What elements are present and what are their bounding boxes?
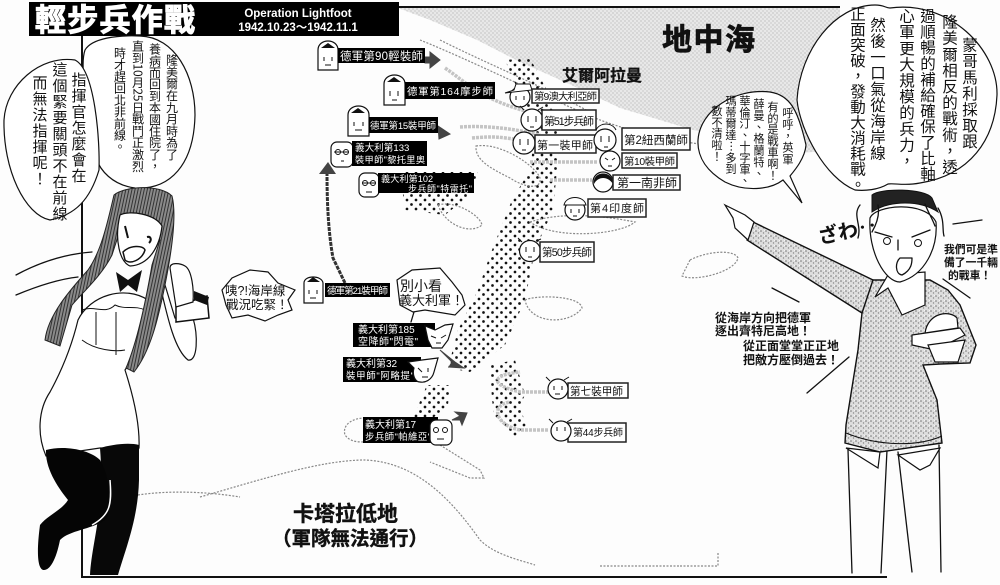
icon: German head (318, 41, 338, 70)
callout: head-on attack: 從正面堂堂正正地 (743, 338, 839, 353)
speech bubble: do not underestimate Italy: 義大利軍！ (399, 293, 464, 308)
speech bubble: British tanks: 華倫汀、十字軍、 (737, 95, 753, 186)
German 21st Panzer division label: 德軍第21裝甲師 (327, 285, 388, 297)
callout: advance from coast: 從海岸方向把德軍 (715, 310, 811, 325)
heading: Qattara Depression: （軍隊無法通行） (272, 522, 428, 551)
speech bubble: coast front (222, 270, 295, 321)
44th Infantry: 第44步兵師 (573, 426, 623, 439)
Italian 102nd division label: 義大利第102 (381, 173, 433, 184)
50th Infantry (518, 238, 594, 262)
1st Armoured: 第一裝甲師 (537, 138, 593, 152)
speech bubble: Montgomery strategy: 正面突破，發動大消耗戰。 (847, 6, 869, 192)
German 21st Panzer division label (304, 277, 390, 303)
hair (857, 190, 944, 238)
9th Australian (505, 84, 599, 107)
callout: 1000 tanks: 備了一千輛 (944, 255, 998, 269)
German 15th Panzer division label: 德軍第15裝甲師 (370, 120, 436, 132)
speech bubble: coast front: 戰況吃緊！ (226, 297, 289, 312)
callout: head-on attack (743, 338, 839, 367)
Italian 185th division label: 義大利第185 (358, 323, 415, 336)
icon: German head (304, 277, 323, 303)
eyes and mouth (125, 226, 151, 243)
2nd New Zealand: 第2紐西蘭師 (624, 133, 688, 147)
speech bubble: British tanks: 有的是戰車啊！ (765, 100, 781, 181)
fist (170, 264, 193, 307)
face (870, 207, 936, 282)
tunic folds (82, 305, 145, 355)
sea: Mediterranean shading (398, 8, 840, 153)
hair (45, 188, 174, 372)
speech bubble: commander absent: 指揮官怎麼會在 (68, 72, 90, 184)
Italian 32nd division label (343, 357, 438, 382)
callout: 1000 tanks: 我們可是準 (944, 242, 998, 256)
white edge between legs (92, 480, 111, 525)
51st Infantry: 第51步兵師 (544, 114, 594, 128)
speech bubble: British tanks (698, 92, 806, 203)
speech bubble: Rommel in hospital: 養病而回到本國住院了， (146, 43, 164, 172)
icon: Italian soldier head (408, 358, 438, 382)
pointing arm (747, 222, 873, 313)
German 164th division label: 德軍第164摩步師 (407, 85, 493, 98)
collar (875, 272, 925, 315)
figure: Rommel character (simplified) (38, 188, 209, 575)
bent leg stocking (38, 448, 110, 570)
heading: Qattara Depression (272, 498, 428, 551)
callout: 1000 tanks: 的戰車！ (948, 268, 991, 282)
speech bubble: Rommel in hospital: 隆美爾在九月時為了 (164, 53, 180, 160)
10th Armoured (600, 151, 677, 171)
Italian 32nd division label: 裝甲師"阿略提" (346, 370, 414, 382)
Italian 133rd division label: 裝甲師"黎托里奧 (355, 154, 425, 165)
Italian 32nd division label: 義大利第32 (346, 357, 398, 370)
Italian 133rd division label (331, 141, 427, 167)
map frame (82, 7, 887, 577)
standing leg stocking (90, 444, 139, 575)
50th Infantry: 第50步兵師 (542, 246, 592, 259)
callout: advance from coast: 逐出齊特尼高地！ (715, 323, 811, 338)
4th Indian: 第4印度師 (590, 201, 644, 215)
4th Indian (564, 198, 646, 220)
icon: Italian mask (430, 420, 452, 445)
heading: Qattara Depression: 卡塔拉低地 (293, 498, 398, 528)
heading: Mediterranean: 地中海 (662, 15, 755, 59)
icon: Italian mask (359, 173, 379, 197)
German 90th Light division label (318, 41, 425, 70)
title bar: Operation Lightfoot (244, 8, 352, 20)
cuff (176, 296, 209, 322)
heading: El Alamein: 艾爾阿拉曼 (562, 62, 642, 86)
speech bubble: do not underestimate Italy (397, 268, 465, 322)
speech bubble: Rommel in hospital (83, 36, 195, 188)
speech bubble: commander absent: 這個緊要關頭不在前線 (50, 61, 70, 222)
action lines: Montgomery (772, 220, 982, 393)
speech bubble: do not underestimate Italy: 別小看 (400, 278, 442, 294)
minefields (400, 58, 560, 437)
2nd New Zealand (594, 124, 690, 151)
speech bubble: Montgomery strategy: 蒙哥馬利採取跟 (959, 37, 981, 150)
coastal road lines (420, 40, 800, 152)
holding tank in hand (912, 314, 965, 350)
speech bubble: Montgomery strategy: 然後一口氣從海岸線 (867, 17, 889, 161)
icon: German head (384, 75, 405, 105)
German 90th Light division label: 德軍第90輕裝師 (340, 49, 423, 63)
1st South African (593, 172, 680, 192)
7th Armoured: 第七裝甲師 (570, 385, 623, 398)
arrow: 21st Panzer moving north (319, 162, 345, 283)
shirt tail (846, 448, 940, 470)
icon: German head (348, 106, 369, 136)
speech bubble: Montgomery strategy: 過順暢的補給確保了比軸 (917, 8, 939, 182)
speech bubble: Montgomery strategy: 心軍更大規模的兵力， (896, 8, 918, 169)
speech bubble: British tanks: 呼呼，英軍 (780, 107, 796, 165)
Italian 185th division label (353, 323, 453, 348)
German 15th Panzer division label (348, 106, 438, 136)
Italian 17th division label: 步兵師"帕維亞" (365, 431, 431, 443)
figure: Montgomery character (simplified) (725, 190, 976, 573)
51st Infantry (520, 106, 596, 131)
pointing hand (725, 205, 754, 240)
sound effect: ざわ‥ (816, 213, 880, 249)
speech bubble: coast front: 咦?!海岸線 (225, 283, 286, 298)
speech bubble: commander absent (4, 59, 99, 222)
Italian 185th division label: 空降師"閃電" (358, 335, 418, 348)
speech bubble: Rommel in hospital: 直到10月25日戰鬥正激烈 (130, 40, 146, 173)
Italian 17th division label (363, 417, 452, 445)
7th Armoured (546, 377, 628, 399)
body tunic (40, 293, 148, 456)
Italian 102nd division label: 步兵師"特雷托" (408, 183, 472, 194)
German 164th division label (384, 75, 495, 105)
allied divisions (505, 84, 690, 442)
ridges and terrain (138, 146, 738, 566)
callout: 1000 tanks (944, 242, 998, 282)
speech bubble: British tanks: 數不清啦！ (709, 104, 725, 162)
speech bubble: British tanks: 薛曼、格蘭特、 (751, 98, 767, 179)
speech bubble: Montgomery strategy (797, 5, 997, 192)
speech bubble: Rommel in hospital: 時才趕回北非前線。 (112, 47, 128, 152)
face (118, 213, 162, 266)
eyes and mouth (875, 230, 930, 275)
Italian 102nd division label (359, 173, 474, 197)
sweater hem (846, 433, 942, 444)
10th Armoured: 第10裝甲師 (624, 155, 675, 168)
44th Infantry (549, 419, 626, 442)
speech bubble: Montgomery strategy: 隆美爾相反的戰術，透 (939, 14, 961, 175)
open mouth (123, 246, 145, 262)
legs (848, 445, 941, 573)
sweater body (845, 278, 976, 452)
title bar: 1942.10.23～1942.11.1 (238, 22, 358, 34)
neck bow (116, 270, 142, 292)
9th Australian: 第9澳大利亞師 (534, 90, 597, 103)
Italian 133rd division label: 義大利第133 (355, 142, 409, 154)
action lines: Rommel (16, 205, 92, 295)
icon: Italian mask (331, 142, 353, 167)
title bar (29, 0, 399, 40)
1st South African: 第一南非師 (617, 175, 677, 190)
callout: head-on attack: 把敵方壓倒過去！ (743, 352, 839, 367)
speech bubble: commander absent: 而無法指揮呢！ (30, 75, 50, 187)
raised arm (160, 285, 196, 360)
allied movement arrows (445, 68, 598, 430)
German arrows (425, 52, 467, 425)
Italian 17th division label: 義大利第17 (365, 418, 417, 431)
icon: Italian soldier head (425, 324, 453, 348)
callout: advance from coast (715, 310, 811, 338)
speech bubble: British tanks: 瑪蒂爾達…多到 (723, 95, 739, 175)
hand (928, 340, 965, 362)
1st Armoured (513, 132, 596, 154)
